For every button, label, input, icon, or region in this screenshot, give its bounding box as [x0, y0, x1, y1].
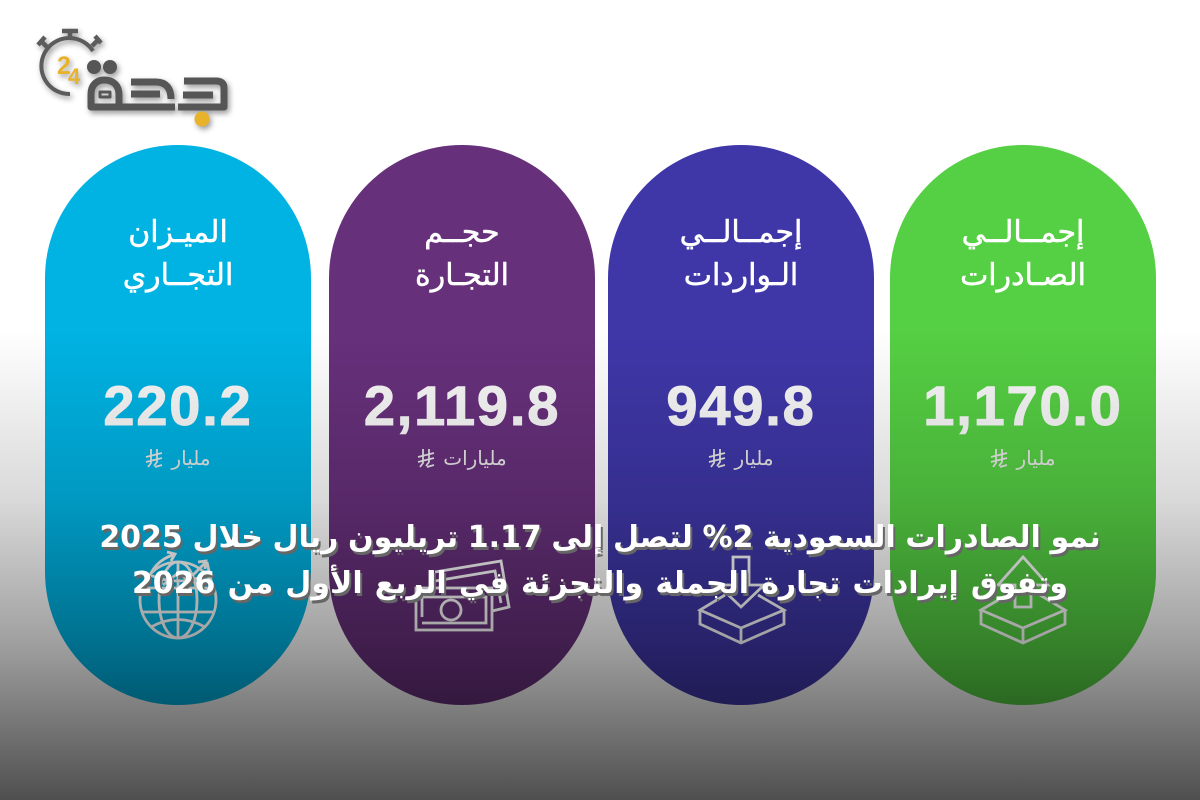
icon: banknotes	[414, 559, 511, 632]
heading: total exports	[960, 215, 1086, 293]
heading: trade balance: التجــاري	[123, 258, 233, 293]
logo dots	[87, 60, 210, 126]
icon: stopwatch	[38, 31, 101, 94]
unit: billions riyal: مليارات	[443, 446, 507, 470]
stopwatch number 24: 2	[57, 52, 71, 80]
unit: billion riyal	[990, 446, 1056, 470]
heading: trade balance	[123, 215, 233, 293]
value: trade volume: 2,119.8	[364, 374, 560, 437]
unit: billion riyal	[708, 446, 774, 470]
panel: total exports	[890, 145, 1156, 705]
heading: total imports	[680, 215, 802, 293]
heading: total imports: الـواردات	[684, 258, 798, 293]
unit: billion riyal	[146, 446, 211, 470]
title: نمو الصادرات السعودية 2% لتصل إلى 1.17 تريليون ريال خلال 2025	[99, 520, 1101, 555]
title: وتفوق إيرادات تجارة الجملة والتجزئة في الربع الأول من 2026	[132, 566, 1068, 601]
title	[99, 520, 1101, 604]
icon: box with up arrow	[978, 555, 1068, 644]
heading: trade volume: التجـارة	[415, 258, 509, 293]
stopwatch number 24: 4	[68, 64, 81, 89]
logo wordmark	[91, 80, 224, 107]
heading: trade balance: الميـزان	[128, 215, 228, 250]
value: total imports: 949.8	[666, 374, 816, 437]
heading: trade volume	[415, 215, 509, 293]
icon: globe with growth arrows	[138, 550, 218, 640]
stopwatch number 24	[57, 52, 81, 89]
heading: total exports: الصـادرات	[960, 258, 1086, 293]
logo: Jeddah 24	[36, 28, 234, 133]
unit: billion riyal: مليار	[734, 446, 774, 470]
panel: trade volume	[329, 145, 595, 705]
panel: trade balance	[45, 145, 311, 705]
heading: total imports: إجمــالــي	[680, 215, 802, 250]
heading: total exports: إجمــالــي	[962, 215, 1084, 250]
unit: billion riyal: مليار	[1016, 446, 1056, 470]
unit: billion riyal: مليار	[171, 446, 211, 470]
value: total exports: 1,170.0	[923, 374, 1123, 437]
value: trade balance: 220.2	[103, 374, 253, 437]
panel: total imports	[608, 145, 874, 705]
icon: box with down arrow	[697, 556, 787, 644]
heading: trade volume: حجــم	[424, 215, 500, 250]
